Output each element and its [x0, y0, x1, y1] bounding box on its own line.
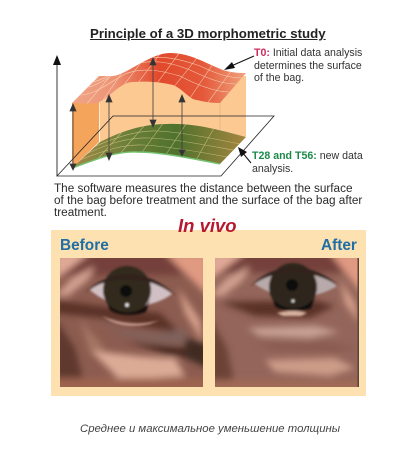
pointer arrow: T0 — [224, 56, 254, 70]
T0 annotation — [254, 47, 362, 84]
vertical axis — [53, 55, 61, 176]
title: Principle of a 3D morphometric study — [90, 26, 326, 41]
reference plane — [57, 116, 274, 176]
T0 annotation: determines the surface — [254, 60, 362, 72]
description text: treatment. — [54, 206, 107, 219]
upper surface: T0 — [72, 50, 246, 106]
measurement arrows — [70, 58, 185, 170]
caption: Среднее и максимальное уменьшение толщины — [80, 423, 340, 435]
3D morphometric diagram — [53, 53, 275, 176]
description text: The software measures the distance between the surface — [54, 182, 352, 195]
before label: Before — [60, 237, 109, 254]
description text — [54, 182, 362, 219]
T0 annotation: of the bag. — [254, 72, 304, 84]
pointer arrow: T28 — [238, 147, 251, 163]
after label: After — [321, 237, 357, 254]
description text: of the bag before treatment and the surface of the bag after — [54, 194, 362, 207]
T28 and T56 annotation — [252, 150, 363, 175]
T28 and T56 annotation: T28 and T56: new data — [252, 150, 363, 162]
bag volume — [72, 76, 246, 168]
T28 and T56 annotation: analysis. — [252, 163, 293, 175]
panel: before and after — [51, 230, 366, 396]
photo: eye before — [60, 258, 203, 387]
in vivo heading: In vivo — [178, 215, 237, 236]
T0 annotation: T0: Initial data analysis — [254, 47, 362, 59]
lower surface: T28 and T56 — [72, 122, 246, 168]
photo: eye after — [215, 258, 359, 387]
